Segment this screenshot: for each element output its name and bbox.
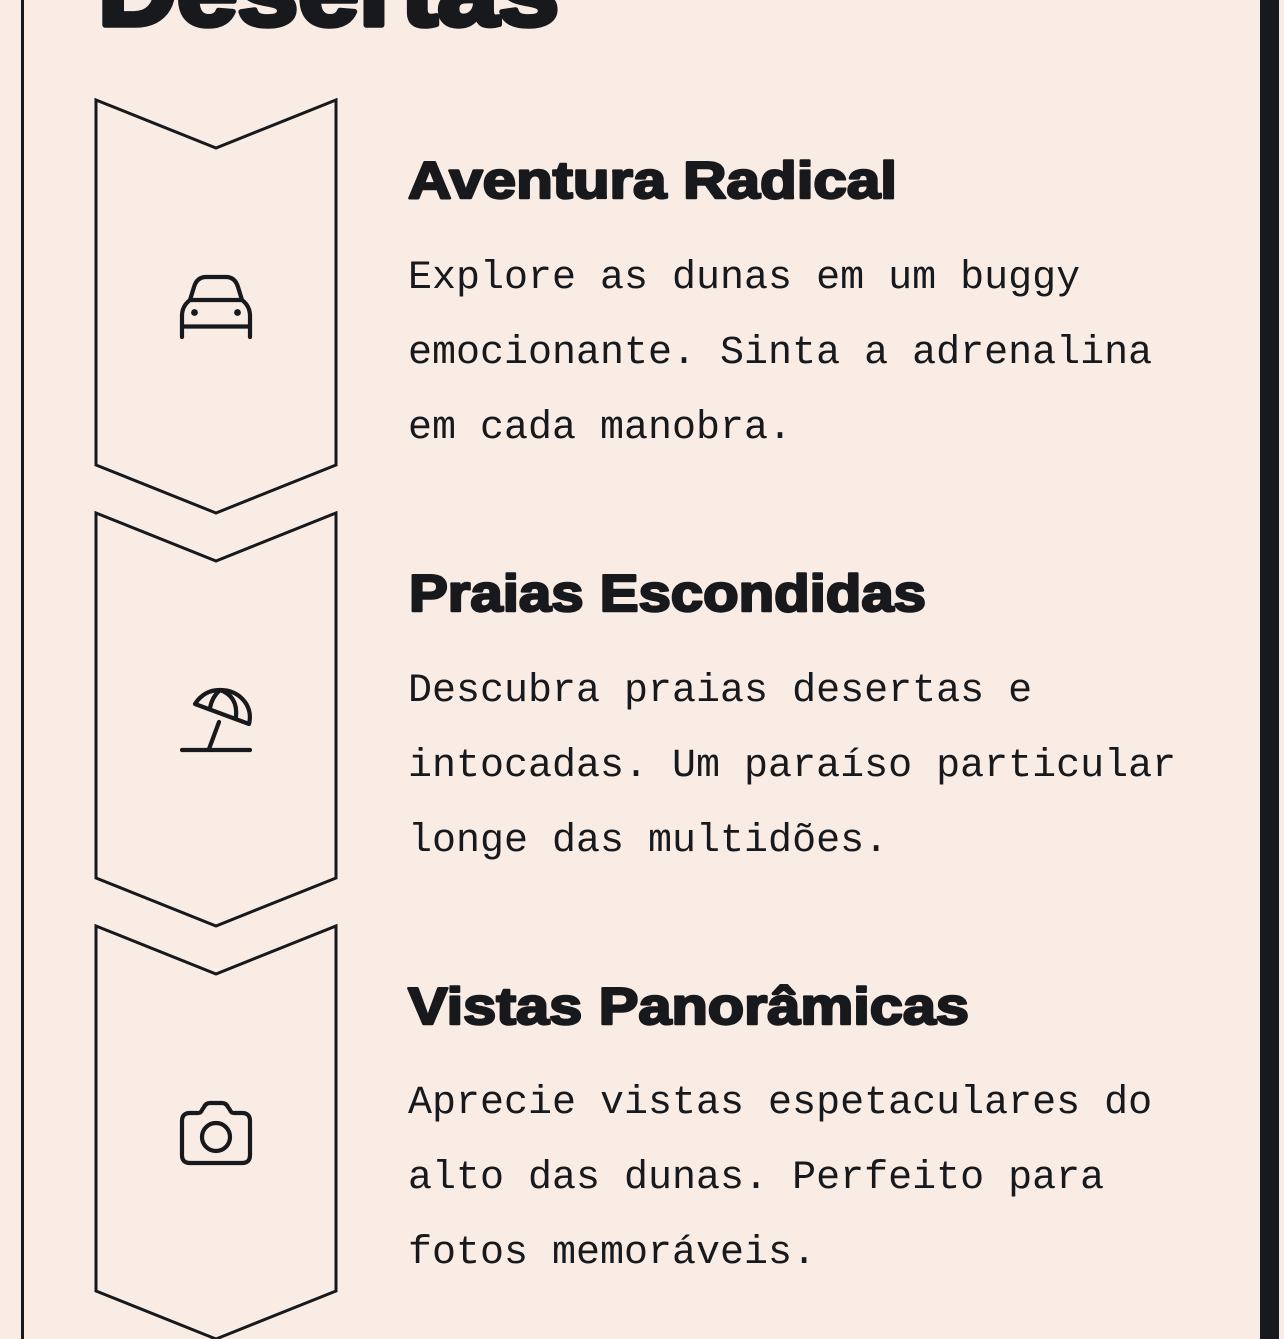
heading: Aventura Radical: Aventura Radical	[408, 152, 897, 210]
panel: Praias Escondidas	[96, 513, 1176, 926]
text: Praias Escondidas description: Descubra praias desertas e	[408, 669, 1032, 714]
text: Vistas Panorâmicas description: alto das dunas. Perfeito para	[408, 1156, 1104, 1201]
text: Aventura Radical description: Explore as dunas em um buggy	[408, 256, 1080, 301]
text: Vistas Panorâmicas description: fotos memoráveis.	[408, 1231, 816, 1276]
panel: Vistas Panorâmicas	[96, 926, 1152, 1339]
text: Aventura Radical description	[408, 256, 1152, 451]
chevron: Aventura Radical	[96, 100, 336, 513]
panel: Aventura Radical	[96, 100, 1152, 513]
heading: Praias Escondidas: Praias Escondidas	[409, 565, 926, 623]
icon: car	[182, 277, 250, 337]
chevron: Vistas Panorâmicas	[96, 926, 336, 1339]
text: Vistas Panorâmicas description: Aprecie vistas espetaculares do	[408, 1081, 1152, 1126]
text: Praias Escondidas description: intocadas. Um paraíso particular	[408, 744, 1176, 789]
icon: beach umbrella	[182, 690, 250, 750]
text: Praias Escondidas description: longe das multidões.	[408, 819, 888, 864]
chevron: Praias Escondidas	[96, 513, 336, 926]
icon: camera	[182, 1103, 250, 1163]
text: Vistas Panorâmicas description	[408, 1081, 1152, 1276]
heading: Vistas Panorâmicas: Vistas Panorâmicas	[408, 978, 969, 1036]
text: Aventura Radical description: em cada manobra.	[408, 406, 792, 451]
text: Aventura Radical description: emocionante. Sinta a adrenalina	[408, 331, 1152, 376]
text: Praias Escondidas description	[408, 669, 1176, 864]
